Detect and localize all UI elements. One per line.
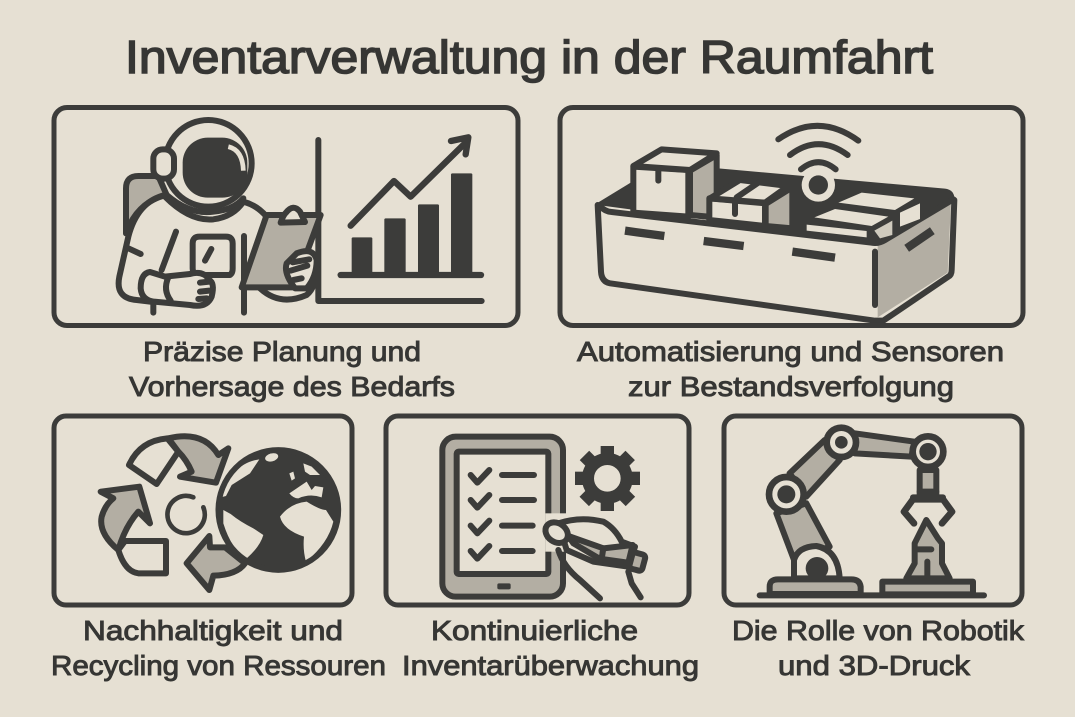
title: Inventarverwaltung in der Raumfahrt bbox=[125, 31, 933, 83]
heading: recycling: Nachhaltigkeit und bbox=[83, 615, 343, 646]
icon: tablet checklist, gear and hand with pen bbox=[442, 437, 646, 598]
heading: recycling bbox=[51, 615, 386, 681]
panel: monitoring bbox=[386, 416, 689, 605]
heading: automation bbox=[577, 336, 1004, 402]
icon: storage bin with boxes and sensor bbox=[597, 126, 954, 321]
panel: automation bbox=[560, 108, 1023, 326]
heading: automation: zur Bestandsverfolgung bbox=[628, 371, 954, 402]
heading: monitoring: Kontinuierliche bbox=[431, 615, 638, 646]
heading: planning bbox=[129, 336, 455, 402]
icon: recycling arrows and globe bbox=[101, 436, 338, 590]
heading: monitoring bbox=[402, 615, 699, 681]
heading: robotics: und 3D-Druck bbox=[778, 650, 971, 681]
panel: recycling bbox=[54, 416, 352, 605]
panel: planning bbox=[54, 108, 518, 326]
heading: robotics: Die Rolle von Robotik bbox=[732, 615, 1025, 646]
heading: recycling: Recycling von Ressouren bbox=[51, 650, 386, 681]
heading: automation: Automatisierung und Sensoren bbox=[577, 336, 1004, 367]
icon: robot arm and 3D printed rocket bbox=[760, 428, 984, 595]
heading: robotics bbox=[732, 615, 1025, 681]
heading: planning: Vorhersage des Bedarfs bbox=[129, 371, 455, 402]
panel: robotics bbox=[724, 416, 1022, 605]
heading: monitoring: Inventarüberwachung bbox=[402, 650, 699, 681]
icon: astronaut with clipboard and chart bbox=[119, 120, 482, 313]
heading: planning: Präzise Planung und bbox=[143, 336, 421, 367]
